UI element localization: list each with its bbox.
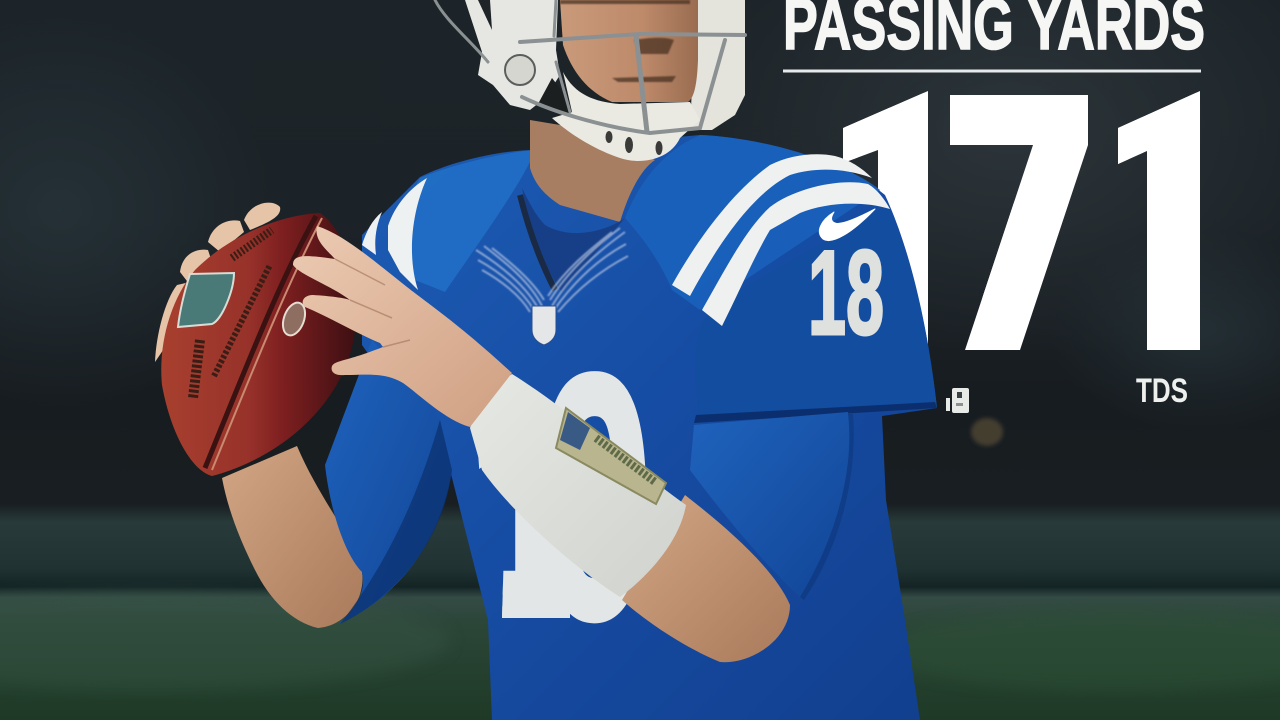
chest number: 10: 0: [537, 304, 652, 690]
football lettering: [193, 230, 272, 398]
sleeve number: 18: 18: [808, 226, 884, 360]
wrist wrap: [470, 374, 686, 597]
big number: 171: 1: [1089, 12, 1251, 430]
chin strap pad: [552, 72, 700, 161]
chest number: 10: [478, 371, 646, 624]
jersey torso: [362, 135, 937, 720]
sleeve hem: [694, 402, 937, 423]
right upper arm sleeve: [690, 412, 849, 597]
right arm: forearm and elbow: [622, 495, 790, 662]
football: [161, 213, 356, 476]
dark gap beside the jaw: [538, 78, 578, 116]
helmet shell left side: [465, 0, 560, 110]
chest number: 10: 1: [457, 306, 620, 691]
chin cup vents: [606, 131, 662, 155]
jersey shield logo: [532, 306, 556, 345]
wrist card patch: [556, 408, 666, 504]
player: [155, 0, 937, 720]
player's left forearm: [222, 446, 362, 628]
collar and chest V detail: [476, 188, 628, 312]
big number: 171: 1: [816, 12, 978, 430]
throwing hand: [293, 226, 512, 427]
arm to torso shadow: [800, 414, 854, 600]
big number: 171: 7: [936, 12, 1098, 430]
small icon: stat glyph: [946, 388, 969, 413]
fingers behind the ball: [155, 203, 280, 362]
sleeve stripes, left shoulder: [362, 178, 427, 290]
helmet side logo: [505, 55, 535, 85]
big number: 171: [843, 91, 1200, 350]
left sleeve: [325, 340, 452, 624]
face shading: [560, 0, 690, 82]
football shield badge: [178, 273, 234, 327]
jersey shoulder panel shading: [404, 135, 937, 420]
facemask: [435, 0, 745, 133]
heading divider rule: [783, 70, 1201, 72]
football seal: [279, 300, 309, 338]
helmet: [435, 0, 745, 161]
sleeve stripes, right shoulder: [672, 154, 890, 326]
helmet interior right: [690, 0, 745, 130]
label: TDS: TDS: [1136, 372, 1188, 410]
face: [560, 0, 698, 102]
helmet ear opening: [478, 0, 492, 30]
swoosh logo: [819, 209, 875, 241]
left sleeve shadow fold: [340, 420, 452, 624]
neck: [530, 120, 655, 222]
